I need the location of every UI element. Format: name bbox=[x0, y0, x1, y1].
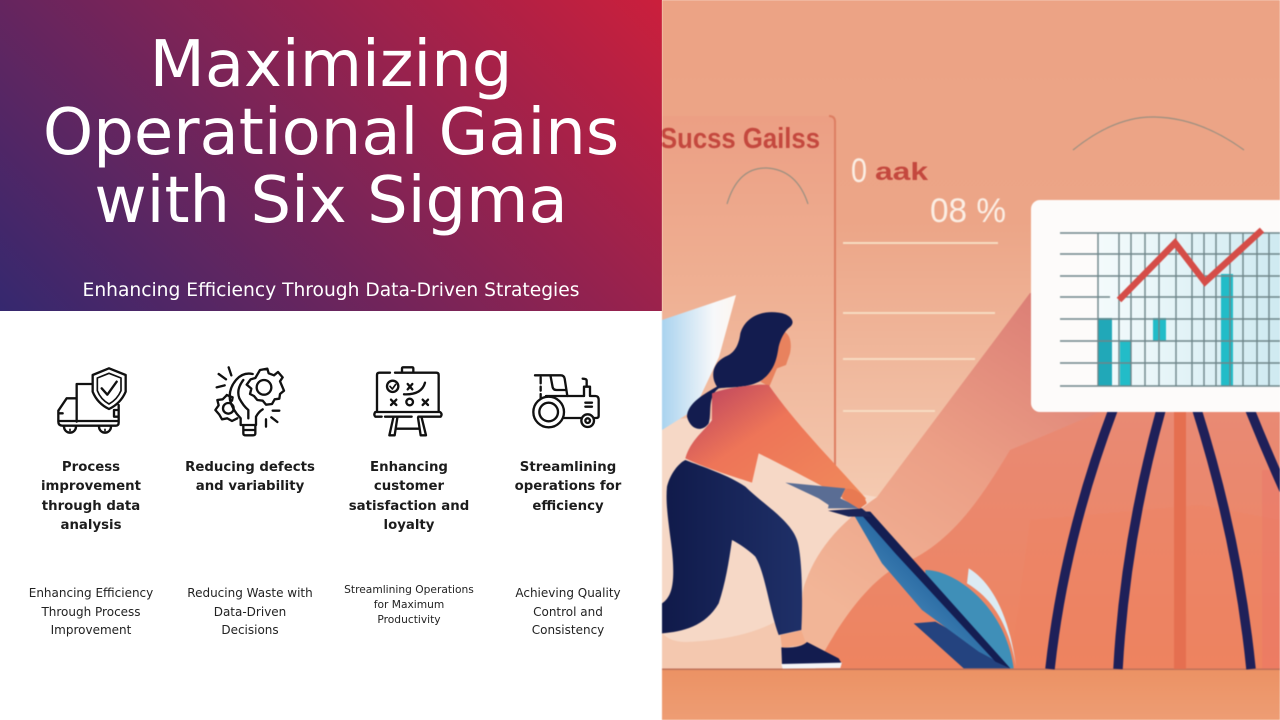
description: data-driven decisions: Decisions bbox=[221, 623, 279, 637]
face and neck bbox=[760, 330, 791, 387]
label: customer satisfaction: customer bbox=[374, 479, 444, 494]
description: data-driven decisions: Data-Driven bbox=[214, 604, 286, 618]
header banner bbox=[0, 0, 662, 311]
label: reducing defects: Reducing defects bbox=[185, 460, 315, 475]
label: customer satisfaction: Enhancing bbox=[370, 460, 448, 475]
description: maximum productivity: Streamlining Operations bbox=[344, 583, 474, 596]
illustrated sign text: 08 % bbox=[930, 192, 1006, 230]
illustrated sign text bbox=[660, 123, 1006, 230]
label: customer satisfaction: satisfaction and bbox=[349, 499, 469, 514]
title: with Six Sigma bbox=[94, 164, 568, 238]
trend line bbox=[1119, 230, 1262, 300]
label: process improvement: Process bbox=[62, 460, 120, 475]
illustrated sign text: aak bbox=[875, 158, 928, 186]
back panels bbox=[662, 116, 1035, 671]
description: quality control bbox=[515, 586, 621, 637]
description: quality control: Control and bbox=[533, 604, 603, 618]
label: customer satisfaction bbox=[349, 460, 469, 533]
shoe bbox=[781, 642, 842, 665]
label: streamlining operations: operations for bbox=[515, 479, 621, 494]
label: process improvement bbox=[41, 460, 141, 533]
label: reducing defects: and variability bbox=[196, 479, 304, 494]
label: customer satisfaction: loyalty bbox=[384, 518, 434, 533]
coral lower band bbox=[815, 412, 1280, 669]
light circle behind figure bbox=[662, 418, 877, 642]
icon: lightbulb with gears bbox=[214, 366, 286, 436]
panel lines bbox=[843, 243, 998, 411]
description: process improvement: Improvement bbox=[51, 623, 131, 637]
decorative arcs bbox=[727, 117, 1244, 204]
redder right edge bbox=[1262, 470, 1280, 669]
description: maximum productivity bbox=[344, 583, 474, 626]
chart bars bbox=[1098, 274, 1233, 386]
deeper coral on the right bbox=[1010, 505, 1280, 669]
icon: tractor bbox=[532, 374, 600, 428]
salmon triangle bbox=[790, 293, 1280, 669]
chart grid bbox=[1060, 233, 1280, 386]
description: maximum productivity: for Maximum bbox=[374, 598, 444, 611]
description: process improvement: Through Process bbox=[41, 604, 141, 618]
hair bbox=[687, 312, 793, 429]
title bbox=[43, 28, 619, 238]
label: process improvement: improvement bbox=[41, 479, 141, 494]
description: data-driven decisions: Reducing Waste with bbox=[187, 586, 313, 600]
illustrated sign text: Sucss Gailss bbox=[662, 123, 820, 155]
label: reducing defects bbox=[185, 460, 315, 494]
description: maximum productivity: Productivity bbox=[377, 613, 441, 626]
description: process improvement bbox=[29, 586, 153, 637]
title: Operational Gains bbox=[43, 96, 619, 170]
ankle bbox=[780, 631, 806, 648]
title: Maximizing bbox=[150, 28, 512, 102]
description: data-driven decisions bbox=[187, 586, 313, 637]
easel legs bbox=[1050, 410, 1280, 669]
illustration: woman shovelling beside growth chart bbox=[661, 0, 1280, 720]
label: process improvement: analysis bbox=[60, 518, 122, 533]
illustrated sign text: 0 bbox=[851, 152, 867, 190]
orange band behind easel bbox=[1174, 410, 1186, 669]
shovel blade bbox=[925, 570, 1014, 668]
floor bbox=[662, 668, 1280, 720]
paper sail bbox=[662, 295, 736, 430]
description: quality control: Consistency bbox=[532, 623, 604, 637]
label: streamlining operations bbox=[515, 460, 622, 514]
description: process improvement: Enhancing Efficiency bbox=[29, 586, 153, 600]
top bbox=[685, 385, 866, 508]
icon: delivery truck with shield bbox=[57, 367, 127, 434]
trousers bbox=[662, 460, 802, 635]
chart board bbox=[1031, 200, 1280, 412]
icon: strategy board on easel bbox=[373, 366, 443, 436]
label: process improvement: through data bbox=[42, 499, 140, 514]
label: streamlining operations: Streamlining bbox=[520, 460, 616, 475]
description: quality control: Achieving Quality bbox=[515, 586, 621, 600]
woman with shovel bbox=[662, 312, 1016, 669]
shovel handle bbox=[785, 483, 862, 508]
background wall bbox=[662, 0, 1280, 720]
subtitle: Enhancing Efficiency Through Data-Driven Strategies bbox=[83, 280, 579, 301]
label: streamlining operations: efficiency bbox=[532, 499, 604, 514]
hand bbox=[842, 489, 867, 509]
